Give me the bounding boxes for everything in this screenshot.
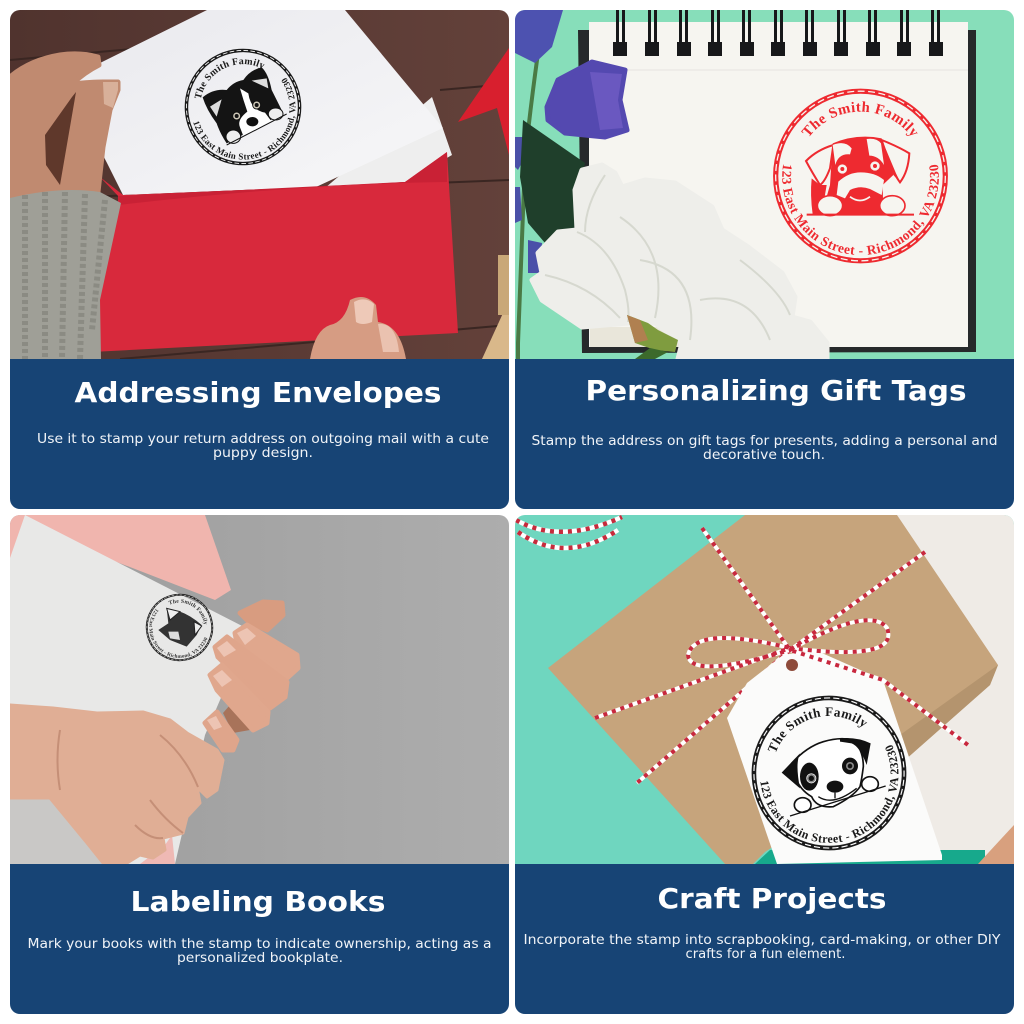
stamp ring and address text: 123 East Main Street - Richmond, VA 23230 <box>149 608 208 658</box>
heading: Labeling Books <box>130 885 386 918</box>
panel: personalizing gift tags <box>515 10 1014 509</box>
photo: stamped envelope on wooden table <box>10 10 509 359</box>
photo: hands holding stamped book <box>10 515 509 864</box>
stamp ring and address text: The Smith Family <box>801 101 918 136</box>
heading: Personalizing Gift Tags <box>586 374 966 407</box>
stamp: red puppy return address <box>773 88 948 264</box>
stamp ring and address text: The Smith Family <box>168 599 208 624</box>
description: puppy design. <box>213 445 313 461</box>
panel: addressing envelopes <box>10 10 509 509</box>
photo: kraft gift box with stamped tag <box>515 515 1014 864</box>
stamp ring and address text: The Smith Family <box>194 58 265 98</box>
photo: notebook with flowers on mint background <box>515 10 1014 359</box>
stamp ring and address text <box>752 696 906 850</box>
puppy illustration <box>782 738 886 816</box>
panel: craft projects <box>515 515 1014 1014</box>
stamp: small puppy on book <box>146 594 214 662</box>
stamp ring and address text <box>184 48 302 166</box>
puppy illustration <box>203 67 287 145</box>
caption bar <box>515 864 1014 1014</box>
stamp: black puppy return address <box>184 48 302 166</box>
heading: Addressing Envelopes <box>74 376 442 409</box>
description: Incorporate the stamp into scrapbooking, card-making, or other DIY <box>524 932 1001 948</box>
stamp ring and address text: 123 East Main Street - Richmond, VA 23230 <box>782 164 939 255</box>
description: personalized bookplate. <box>177 950 343 966</box>
caption bar <box>10 864 509 1014</box>
stamp ring and address text: 123 East Main Street - Richmond, VA 23230 <box>193 78 296 160</box>
description: Mark your books with the stamp to indicate ownership, acting as a <box>28 936 492 952</box>
description: Use it to stamp your return address on outgoing mail with a cute <box>37 431 489 447</box>
stamp ring and address text: The Smith Family <box>768 707 868 752</box>
description <box>37 431 489 461</box>
caption bar <box>10 359 509 509</box>
caption bar <box>515 359 1014 509</box>
description: Stamp the address on gift tags for presents, adding a personal and <box>532 433 998 449</box>
stamp ring and address text <box>773 88 948 264</box>
description: decorative touch. <box>703 447 825 463</box>
description <box>532 433 998 463</box>
description <box>524 932 1001 962</box>
puppy illustration <box>158 608 202 647</box>
stamp: black boxer puppy on tag <box>752 696 906 850</box>
description <box>28 936 492 966</box>
puppy illustration <box>806 137 914 216</box>
spiral binding rings <box>613 10 943 56</box>
panel: labeling books <box>10 515 509 1014</box>
description: crafts for a fun element. <box>686 946 846 962</box>
heading: Craft Projects <box>658 882 886 915</box>
stamp ring and address text: 123 East Main Street - Richmond, VA 23230 <box>760 745 898 843</box>
